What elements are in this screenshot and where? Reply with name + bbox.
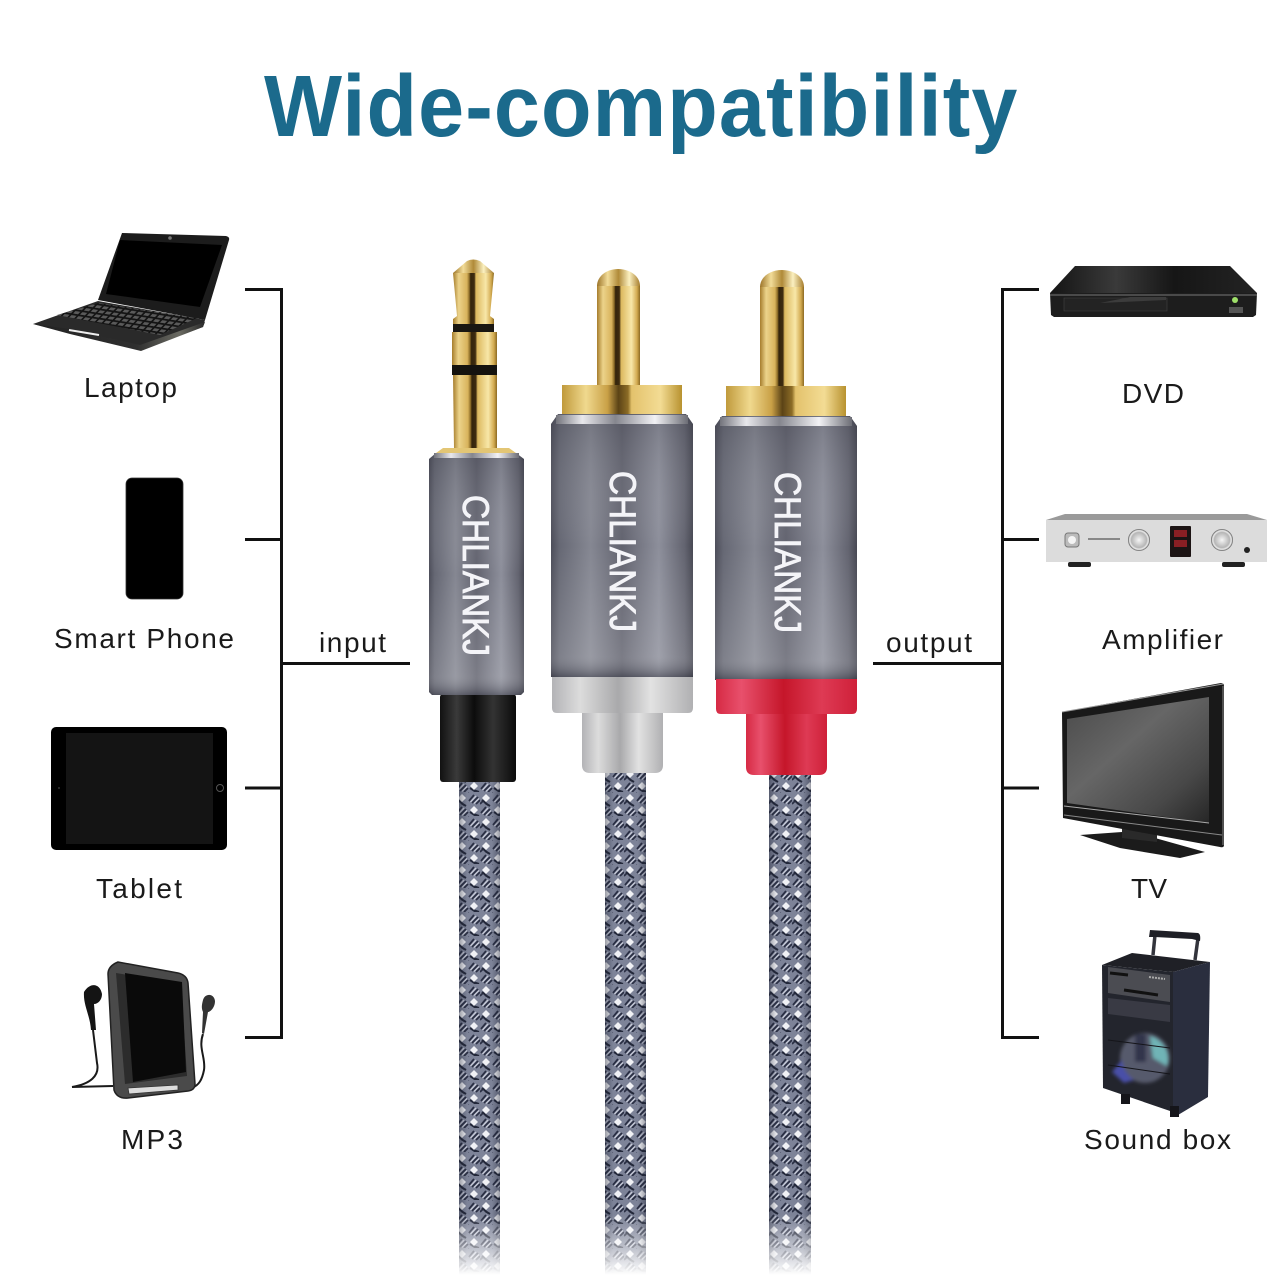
tablet label: Tablet — [96, 873, 182, 904]
title: Wide-compatibility — [264, 57, 1017, 154]
sound box label: Sound box — [1084, 1124, 1231, 1155]
device: amplifier — [1046, 514, 1267, 567]
braided cable — [457, 780, 502, 1280]
output bracket connector — [873, 290, 1039, 1038]
red rca connector — [715, 270, 857, 1280]
rca pin — [760, 270, 804, 388]
tv label: TV — [1131, 873, 1167, 904]
rca brand text: CHLIANKJ — [767, 472, 808, 633]
red band and stem — [716, 679, 857, 775]
device: sound box speaker — [1102, 930, 1210, 1117]
mp3 label: MP3 — [121, 1124, 183, 1155]
rca housing — [551, 414, 693, 677]
input label: input — [319, 627, 386, 658]
device: tablet — [51, 727, 227, 850]
braided cable — [767, 772, 813, 1280]
output label: output — [886, 627, 972, 658]
silver band and stem — [552, 677, 693, 773]
input bracket connector — [245, 290, 410, 1038]
device: laptop — [33, 233, 229, 351]
rca brand text: CHLIANKJ — [602, 471, 643, 632]
3.5mm jack connector — [429, 260, 524, 1280]
jack tip and rings — [436, 260, 516, 453]
rca collar — [726, 386, 846, 418]
device: dvd player — [1050, 266, 1257, 317]
rca collar — [562, 385, 682, 417]
rca pin — [597, 269, 640, 386]
dvd label: DVD — [1122, 378, 1184, 409]
laptop label: Laptop — [84, 372, 177, 403]
braided cable — [603, 770, 648, 1280]
device: television — [1062, 683, 1224, 858]
jack brand text: CHLIANKJ — [455, 495, 496, 656]
jack strain relief — [440, 694, 516, 782]
rca housing — [715, 416, 857, 680]
device: mp3 player with earphones — [72, 962, 215, 1098]
jack housing — [429, 453, 524, 695]
smart phone label: Smart Phone — [54, 623, 234, 654]
amplifier label: Amplifier — [1102, 624, 1223, 655]
device: smart phone — [126, 478, 183, 599]
white rca connector — [551, 269, 693, 1280]
